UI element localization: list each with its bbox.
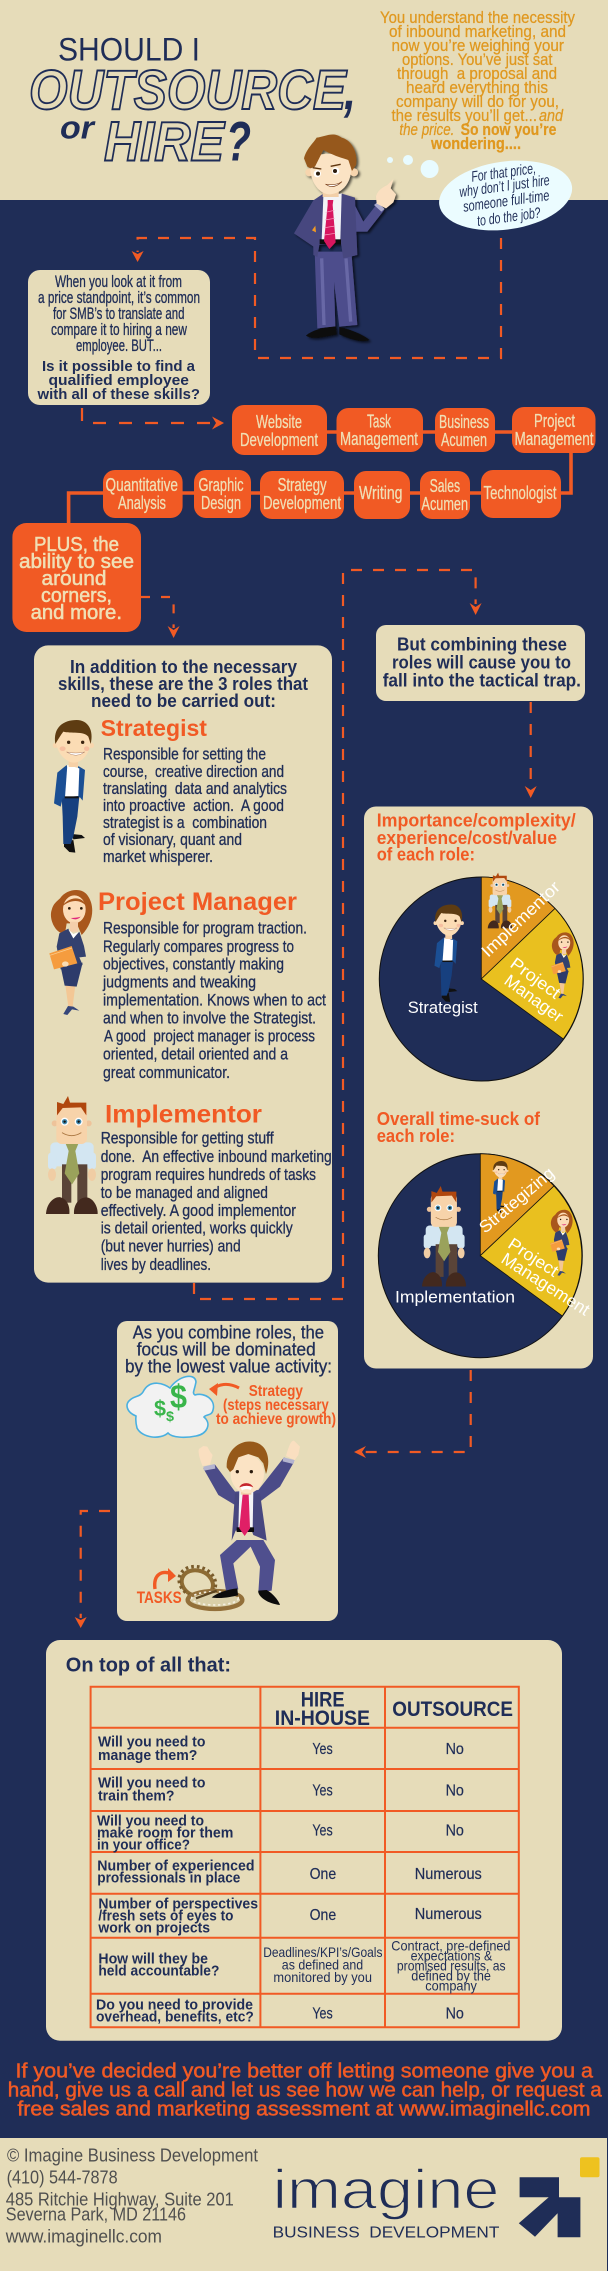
row: office room	[97, 1813, 464, 1854]
skill: Technologist: Technologist	[484, 482, 556, 503]
strategist heading: Strategist	[101, 715, 207, 741]
heading: overall time-suck	[377, 1109, 541, 1146]
panel: tactical trap: roles will cause you to	[392, 653, 571, 673]
row: office room: No	[446, 1823, 464, 1840]
comparison heading: On top of all that:	[66, 1655, 231, 1677]
row: office room: Yes	[312, 1823, 333, 1840]
intro text block: So now you’re	[461, 121, 556, 139]
title: SHOULD I	[58, 32, 200, 68]
row: overhead: Do you need to provide	[96, 1997, 253, 2014]
pie chart: time by role: Management	[498, 1249, 593, 1320]
table column headers: IN-HOUSE	[275, 1707, 370, 1730]
project manager description: judgments and tweaking	[102, 972, 256, 991]
panel: three roles	[34, 645, 332, 1283]
row: accountability: monitored by you	[273, 1969, 372, 1985]
callout: plus box: PLUS, the	[34, 533, 119, 556]
row: office room: in your office?	[97, 1837, 190, 1854]
dashed arrow: trap to pies	[525, 702, 537, 798]
roles heading	[58, 657, 308, 711]
skill: Writing: Writing	[359, 482, 402, 503]
pie chart: importance by role	[379, 873, 583, 1081]
row: accountability: promised results, as	[397, 1958, 506, 1974]
panel: pie charts	[364, 806, 593, 1368]
row: experienced professionals: professionals in place	[97, 1870, 240, 1887]
call to action: hand, give us a call and let us see how we can help, or request a	[8, 2080, 603, 2102]
title: OUTSOURCE	[29, 58, 347, 121]
dashed arrow: pies to combine panel	[354, 1370, 471, 1458]
illustration: businessman pointing	[294, 134, 396, 341]
roles heading: In addition to the necessary	[70, 657, 297, 677]
pie chart: importance by role: Strategist	[408, 998, 478, 1017]
skill: Sales Acumen: Acumen	[422, 493, 468, 514]
dashed arrow: combine panel to table	[75, 1511, 110, 1628]
contact details: (410) 544-7878	[7, 2167, 118, 2187]
icon: bear trap	[175, 1562, 242, 1609]
contact details: Severna Park, MD 21146	[6, 2205, 186, 2225]
project manager description	[102, 918, 326, 1082]
arrow: tasks pointer	[155, 1568, 176, 1589]
logo: Imagine Business Development	[273, 2157, 600, 2241]
strategist description: into proactive action. A good	[103, 796, 284, 815]
implementor description: effectively. A good implementor	[101, 1201, 296, 1220]
row: perspectives: One	[310, 1907, 336, 1924]
intro text block: of inbound marketing, and	[389, 23, 566, 41]
pie chart: time by role: Project	[505, 1234, 562, 1281]
heading: overall time-suck: Overall time-suck of	[377, 1109, 541, 1129]
contact details: www.imaginellc.com	[5, 2226, 162, 2246]
pie chart: importance by role: Manager	[501, 971, 567, 1026]
intro text block: and	[539, 107, 564, 125]
strategist description: translating data and analytics	[103, 779, 287, 798]
intro text block	[380, 9, 576, 153]
row: experienced professionals: One	[310, 1866, 336, 1883]
skill: Sales Acumen	[420, 471, 470, 519]
icon: implementor figure	[46, 1096, 98, 1214]
row: office room: Will you need to	[97, 1813, 204, 1830]
strategist description: course, creative direction and	[103, 762, 284, 781]
row: manage them	[98, 1734, 464, 1764]
panel: combined roles	[117, 1321, 338, 1621]
pie chart: importance by role: Implementor	[478, 877, 564, 961]
implementor description: Responsible for getting stuff	[101, 1129, 274, 1148]
combine text	[125, 1322, 332, 1376]
row: overhead: Yes	[312, 2006, 333, 2023]
row: accountability: held accountable?	[98, 1963, 219, 1980]
row: experienced professionals: Numerous	[415, 1866, 482, 1883]
panel: price standpoint: for SMB’s to translate and	[53, 304, 184, 323]
skill: Task Management: Management	[340, 428, 418, 449]
footer band	[0, 2138, 607, 2271]
implementor description: lives by deadlines.	[101, 1255, 211, 1274]
table column headers: OUTSOURCE	[392, 1698, 513, 1721]
icon: money cloud: $	[166, 1408, 174, 1424]
intro text block: wondering....	[430, 135, 521, 153]
heading: importance of each role: Importance/complexity/	[377, 810, 576, 830]
row: accountability: How will they be	[98, 1951, 208, 1968]
skill: Strategy Development: Strategy	[278, 474, 327, 495]
row: train them: Will you need to	[98, 1775, 205, 1792]
project manager description: Responsible for program traction.	[103, 918, 307, 938]
row: experienced professionals: Number of experienced	[97, 1858, 254, 1875]
panel: price standpoint: When you look at it from	[55, 272, 182, 291]
skill: Writing	[354, 471, 410, 519]
row: overhead: No	[446, 2006, 464, 2023]
intro text block: through a proposal and	[397, 65, 557, 83]
dashed arrow: thought bubble to price box	[132, 238, 501, 358]
row: overhead	[96, 1997, 464, 2026]
skill: Business Acumen: Business	[439, 411, 489, 432]
implementor description: to be managed and aligned	[101, 1183, 268, 1202]
illustration: trapped businessman	[175, 1441, 300, 1609]
row: manage them: manage them?	[98, 1747, 197, 1764]
panel: price standpoint: qualified employee	[48, 372, 189, 389]
project manager description: A good project manager is process	[104, 1027, 315, 1046]
row: accountability: company	[425, 1978, 477, 1994]
project manager description: great communicator.	[103, 1063, 230, 1082]
row: perspectives: Number of perspectives	[98, 1896, 258, 1913]
strategy label: to achieve growth)	[216, 1411, 336, 1428]
title: ,	[343, 58, 356, 121]
skill: Strategy Development: Development	[263, 492, 341, 513]
roles heading: skills, these are the 3 roles that	[58, 674, 308, 694]
skill: Quantitative Analysis: Quantitative	[106, 474, 178, 495]
table column headers: HIRE	[301, 1689, 345, 1712]
comparison table	[91, 1687, 519, 2027]
call to action	[8, 2061, 603, 2121]
skill: Graphic Design: Graphic	[198, 474, 244, 495]
row: train them: No	[446, 1783, 464, 1800]
pie chart: time by role	[378, 1154, 593, 1358]
implementor description: is detail oriented, works quickly	[101, 1219, 293, 1238]
callout: plus box	[12, 523, 141, 632]
skill: Task Management: Task	[367, 410, 391, 432]
intro text block: the price.	[399, 121, 454, 139]
heading: importance of each role: of each role:	[377, 845, 475, 865]
callout: plus box: and more.	[31, 601, 122, 624]
panel: price standpoint: with all of these skills?	[37, 386, 200, 403]
panel: comparison	[46, 1640, 562, 2041]
row: manage them: Yes	[312, 1741, 333, 1758]
tasks label: TASKS	[137, 1588, 182, 1607]
skill: Graphic Design: Design	[201, 492, 241, 513]
intro text block: now you’re weighing your	[392, 37, 564, 55]
project manager description: implementation. Knows when to act	[103, 991, 326, 1010]
panel: tactical trap	[376, 625, 585, 701]
row: accountability: Deadlines/KPI’s/Goals	[263, 1944, 382, 1960]
skill: Business Acumen: Acumen	[441, 429, 487, 450]
strategist description: market whisperer.	[103, 847, 213, 866]
logo: Imagine Business Development: BUSINESS DEVELOPMENT	[273, 2224, 500, 2241]
strategy label: Strategy	[249, 1383, 303, 1400]
combine text: focus will be dominated	[137, 1339, 316, 1359]
row: overhead: overhead, benefits, etc?	[96, 2009, 254, 2026]
panel: price standpoint: compare it to hiring a new	[51, 320, 188, 339]
skill: Business Acumen	[435, 408, 495, 452]
intro text block: heard everything this	[406, 79, 548, 97]
heading: importance of each role	[377, 810, 576, 865]
implementor description	[101, 1129, 332, 1274]
combine text: As you combine roles, the	[133, 1322, 324, 1342]
intro text block: options. You’ve just sat	[402, 51, 553, 69]
arrow: strategy pointer	[209, 1383, 239, 1396]
title: or	[60, 110, 96, 146]
icon: money cloud: $	[154, 1396, 166, 1421]
strategist description: Responsible for setting the	[103, 744, 266, 763]
intro text block: company will do for you,	[396, 93, 559, 111]
dashed arrow: plus box to roles	[141, 597, 180, 638]
combine text: by the lowest value activity:	[125, 1356, 332, 1376]
heading: importance of each role: experience/cost/value	[377, 828, 557, 848]
implementor heading: Implementor	[105, 1101, 262, 1129]
row: accountability: Contract, pre-defined	[391, 1938, 510, 1954]
icon: strategist figure	[53, 720, 94, 853]
row: manage them: No	[446, 1741, 464, 1758]
dashed arrow: price box to skills	[82, 408, 224, 430]
project manager heading: Project Manager	[98, 888, 297, 916]
row: manage them: Will you need to	[98, 1734, 205, 1751]
callout: plus box: around	[42, 567, 106, 590]
skill: Graphic Design	[194, 470, 251, 518]
row: perspectives	[97, 1896, 482, 1937]
project manager description: objectives, constantly making	[103, 955, 284, 974]
title: ?	[226, 110, 251, 172]
skill: Website Development	[232, 405, 327, 455]
skill: Strategy Development	[260, 471, 344, 519]
panel: tactical trap: fall into the tactical trap.	[383, 671, 581, 691]
skill: Quantitative Analysis: Analysis	[118, 492, 166, 513]
skill: Project Management: Project	[534, 410, 575, 431]
roles heading: need to be carried out:	[91, 691, 276, 711]
panel: price standpoint	[28, 270, 210, 405]
strategist description: of visionary, quant and	[103, 830, 242, 849]
project manager description: oriented, detail oriented and a	[103, 1045, 289, 1064]
thought bubble with question	[387, 153, 577, 238]
thought bubble with question: someone full-time	[462, 187, 550, 216]
table column headers	[275, 1689, 513, 1730]
row: accountability: as defined and	[282, 1957, 363, 1973]
contact details: © Imagine Business Development	[7, 2146, 258, 2166]
skill: Sales Acumen: Sales	[430, 475, 460, 496]
pie chart: time by role: Strategizing	[475, 1163, 558, 1237]
call to action: free sales and marketing assessment at www.imaginellc.com	[17, 2099, 590, 2121]
strategist description	[103, 744, 287, 866]
implementor description: program requires hundreds of tasks	[101, 1165, 316, 1184]
row: train them	[98, 1775, 464, 1805]
row: accountability: expectations &	[411, 1948, 493, 1964]
skill: Technologist	[481, 470, 561, 518]
header band	[0, 0, 608, 200]
thought bubble with question: to do the job?	[476, 204, 542, 230]
strategy label	[216, 1383, 336, 1428]
row: accountability	[98, 1938, 511, 1994]
title	[29, 32, 356, 172]
row: perspectives: Numerous	[415, 1906, 482, 1923]
contact details	[5, 2146, 258, 2246]
implementor description: (but never hurries) and	[101, 1236, 241, 1256]
icon: money cloud	[127, 1376, 214, 1437]
skill: Task Management	[336, 408, 423, 452]
row: experienced professionals	[97, 1858, 482, 1887]
call to action: If you’ve decided you’re better off letting someone give you a	[16, 2061, 594, 2083]
strategist description: strategist is a combination	[103, 813, 267, 832]
logo: Imagine Business Development: imagine	[273, 2157, 499, 2220]
panel: price standpoint: employee. BUT...	[76, 336, 162, 355]
project manager description: and when to involve the Strategist.	[103, 1008, 316, 1028]
row: train them: train them?	[98, 1788, 174, 1805]
skill connectors	[69, 432, 571, 523]
icon: money cloud: $	[170, 1378, 187, 1415]
dashed arrow: roles to tactical trap	[194, 570, 482, 1299]
strategy label: (steps necessary	[223, 1397, 329, 1414]
thought bubble with question: why don’t I just hire	[458, 172, 551, 201]
skill: Website Development: Website	[256, 411, 302, 432]
row: perspectives: /fresh sets of eyes to	[98, 1908, 233, 1925]
project manager description: Regularly compares progress to	[103, 937, 294, 956]
row: office room: make room for them	[97, 1825, 233, 1842]
row: accountability: defined by the	[411, 1968, 491, 1984]
contact details: 485 Ritchie Highway, Suite 201	[6, 2190, 234, 2210]
icon: project manager figure	[49, 890, 92, 1015]
panel: price standpoint: a price standpoint, it’s common	[38, 288, 200, 307]
skill: Quantitative Analysis	[103, 470, 183, 518]
callout: plus box: ability to see	[19, 550, 134, 573]
panel: price standpoint: Is it possible to find a	[42, 358, 196, 375]
heading: overall time-suck: each role:	[377, 1126, 455, 1146]
panel: tactical trap: But combining these	[397, 635, 567, 655]
title: HIRE	[104, 110, 225, 172]
row: perspectives: work on projects	[97, 1920, 210, 1937]
row: train them: Yes	[312, 1783, 333, 1800]
pie chart: importance by role: Project	[507, 954, 564, 1003]
callout: plus box: corners,	[41, 584, 112, 607]
skill: Project Management	[512, 407, 596, 453]
intro text block: the results you’ll get...	[392, 107, 537, 125]
thought bubble with question: For that price,	[470, 160, 537, 186]
implementor description: done. An effective inbound marketing	[101, 1147, 332, 1166]
skill: Website Development: Development	[240, 429, 318, 450]
table grid	[91, 1687, 519, 2027]
intro text block: You understand the necessity	[380, 9, 576, 27]
pie chart: time by role: Implementation	[395, 1288, 515, 1306]
